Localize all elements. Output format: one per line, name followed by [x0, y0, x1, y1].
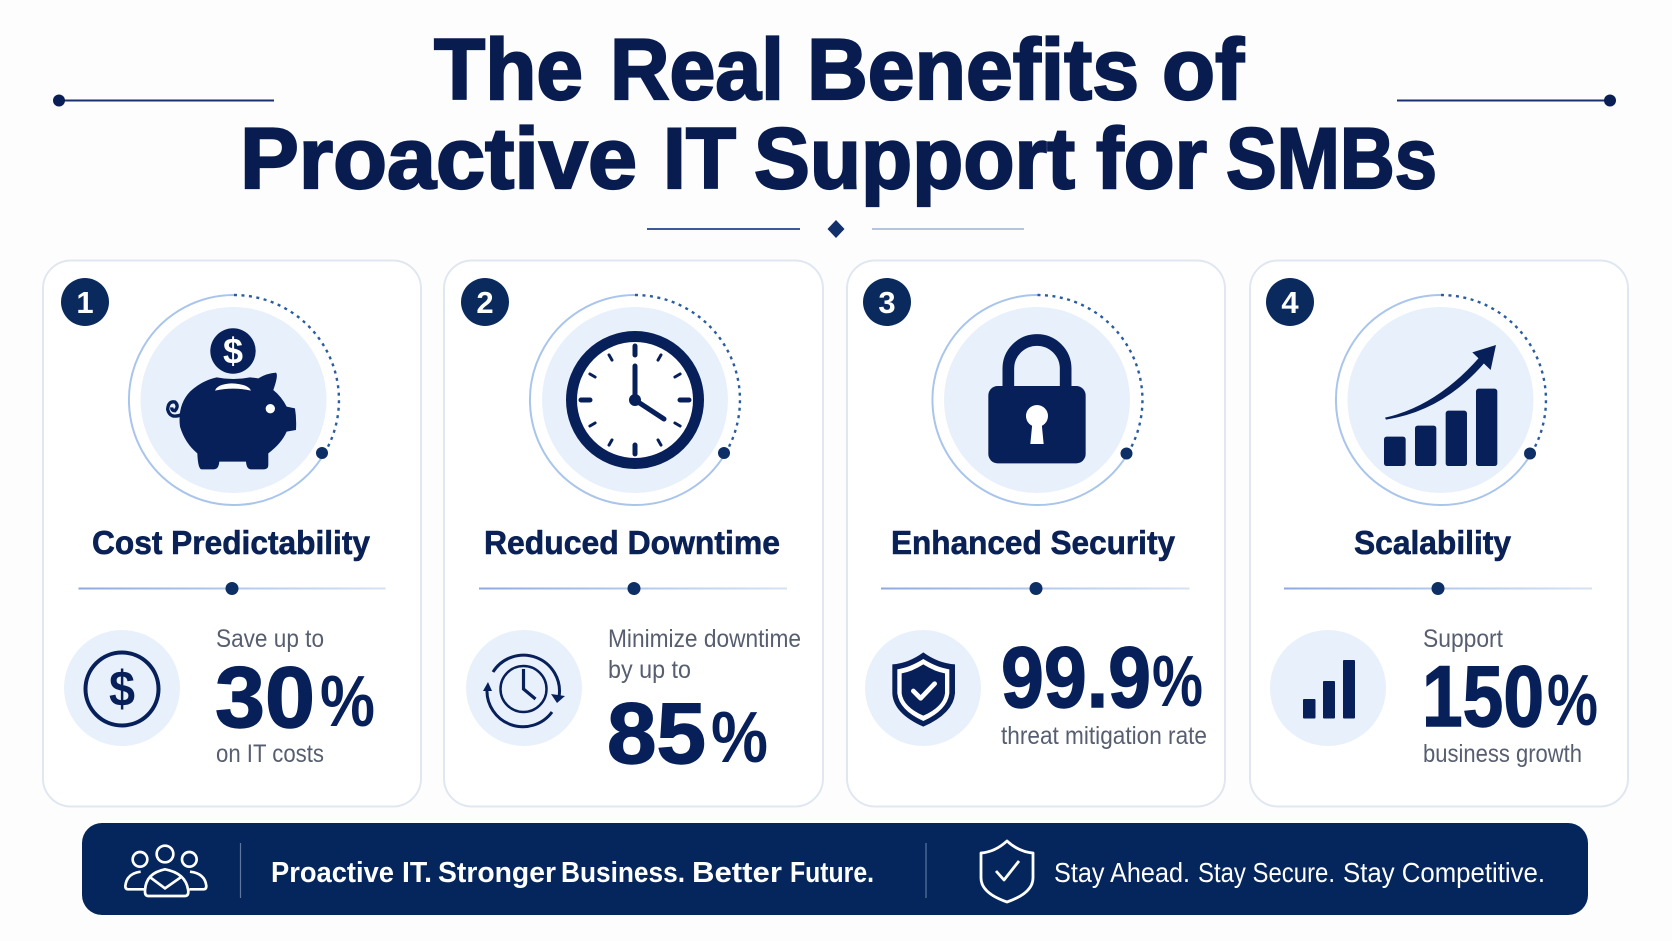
stat: support 150%: business growth: [1423, 740, 1582, 768]
title: Benefits: [807, 22, 1139, 118]
icon: shield: [981, 841, 1033, 902]
panel: enhanced security: [847, 260, 1225, 806]
banner slogan: IT.: [402, 857, 432, 889]
divider: [1284, 582, 1592, 595]
banner slogan: Stronger: [438, 857, 556, 889]
card heading: Enhanced Security: [891, 524, 1176, 561]
banner: [82, 823, 1588, 915]
stat: minimize downtime 85%: by up to: [608, 656, 691, 684]
banner tagline: Stay Competitive.: [1343, 857, 1545, 888]
banner slogan: Better: [692, 857, 782, 889]
left title rule: [53, 94, 274, 106]
icon: shield check: [865, 630, 981, 746]
icon: padlock: [932, 295, 1142, 505]
icon: signal bars: [1270, 630, 1386, 746]
panel: reduced downtime: [444, 260, 823, 806]
stat: save up to 30%: Save up to: [216, 625, 324, 653]
icon: growth chart: [1336, 295, 1546, 505]
panel: scalability: [1250, 260, 1628, 806]
title: Proactive: [240, 111, 637, 207]
right title rule: [1397, 94, 1616, 106]
banner slogan: Business.: [561, 857, 685, 889]
banner slogan: Proactive: [271, 857, 394, 889]
stat: support 150%: %: [1547, 661, 1598, 741]
card heading: Cost Predictability: [92, 524, 371, 561]
number badge 4: [1266, 278, 1314, 326]
icon: dollar coin: $: [109, 661, 135, 717]
stat: support 150%: 150: [1422, 649, 1544, 745]
banner tagline: Stay Ahead.: [1054, 857, 1190, 888]
stat: 99.9% threat mitigation: 99.9: [1001, 630, 1151, 726]
banner tagline: [1054, 857, 1545, 888]
separator: [925, 843, 927, 898]
number badge 4: 4: [1281, 285, 1299, 320]
banner slogan: Future.: [790, 857, 874, 889]
icon: piggy bank: [129, 295, 339, 505]
stat: 99.9% threat mitigation: threat mitigation rate: [1001, 722, 1207, 750]
number badge 2: 2: [476, 285, 494, 320]
number badge 3: 3: [878, 285, 896, 320]
stat: save up to 30%: on IT costs: [216, 740, 324, 768]
number badge 3: [863, 278, 911, 326]
stat: minimize downtime 85%: %: [711, 698, 768, 778]
number badge 2: [461, 278, 509, 326]
title: IT: [663, 111, 736, 207]
stat: minimize downtime 85%: Minimize downtime: [608, 625, 801, 653]
divider: [479, 582, 787, 595]
banner tagline: Stay Secure.: [1198, 857, 1335, 888]
number badge 1: 1: [76, 285, 94, 320]
title: of: [1162, 22, 1244, 118]
title: Support: [754, 111, 1075, 207]
number badge 1: [61, 278, 109, 326]
title: SMBs: [1226, 111, 1437, 207]
banner slogan: [271, 857, 874, 889]
icon: people: [125, 846, 206, 896]
icon: dollar coin: [64, 630, 180, 746]
stat: support 150%: Support: [1423, 625, 1503, 653]
title: for: [1096, 111, 1207, 207]
panel: cost predictability: [43, 260, 421, 806]
stat: minimize downtime 85%: 85: [607, 686, 706, 782]
icon: rotating clock: [466, 630, 582, 746]
stat: save up to 30%: [215, 625, 375, 768]
title: Real: [610, 22, 784, 118]
stat: save up to 30%: 30: [215, 650, 315, 746]
stat: 99.9% threat mitigation: %: [1152, 642, 1203, 722]
icon: piggy bank: $: [223, 330, 243, 372]
title divider with diamond: [647, 220, 1024, 238]
divider: [881, 582, 1190, 595]
stat: support 150%: [1422, 625, 1598, 768]
title: [240, 22, 1437, 207]
stat: save up to 30%: %: [320, 662, 375, 742]
stat: minimize downtime 85%: [607, 625, 801, 782]
stat: 99.9% threat mitigation: [1001, 630, 1207, 750]
divider: [78, 582, 386, 595]
separator: [240, 843, 242, 898]
icon: clock: [530, 295, 740, 505]
card heading: Reduced Downtime: [484, 524, 780, 561]
title: The: [434, 22, 583, 118]
card heading: Scalability: [1354, 524, 1512, 561]
